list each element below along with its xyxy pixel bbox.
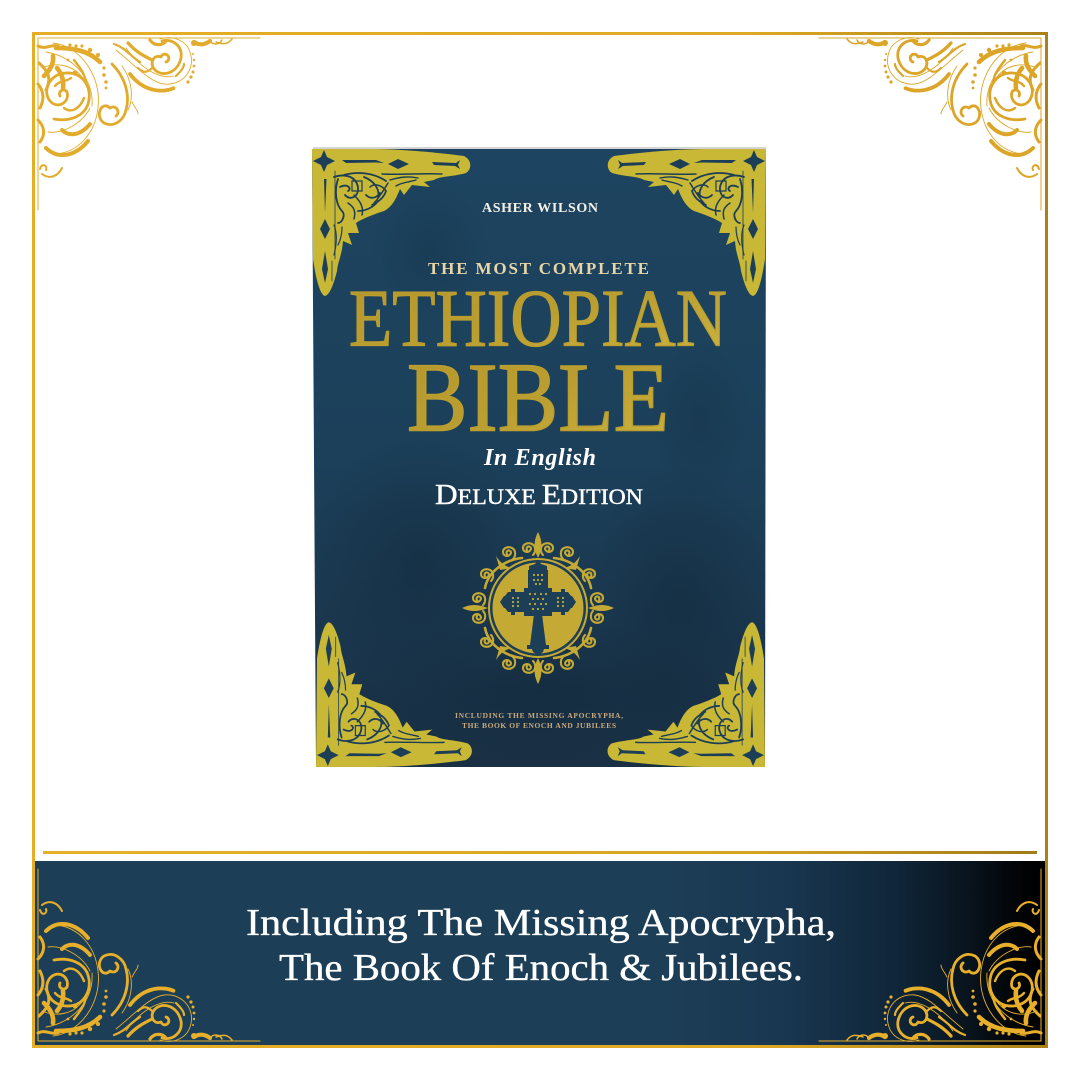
medallion disc xyxy=(492,562,584,654)
banner caption text xyxy=(246,902,836,989)
cross body xyxy=(500,560,576,616)
gold rule above banner xyxy=(43,851,1037,854)
deluxe edition: DELUXE EDITION xyxy=(435,479,643,511)
banner: bottom caption panel xyxy=(35,861,1045,1045)
cross perforations xyxy=(512,574,564,610)
flourish: top-left corner xyxy=(38,38,260,210)
banner caption text: The Book Of Enoch & Jubilees. xyxy=(279,947,803,989)
cover footnote: THE BOOK OF ENOCH AND JUBILEES xyxy=(462,721,616,730)
ornament: bottom-right xyxy=(608,622,765,767)
flourish: bottom-right corner xyxy=(819,869,1041,1041)
medallion xyxy=(462,532,614,684)
title: Bible: BIBLE xyxy=(407,344,669,452)
ornament: top-left xyxy=(312,149,470,296)
icon: ethiopian cross xyxy=(500,560,576,655)
book top shadow xyxy=(313,147,766,149)
medallion ring xyxy=(489,559,587,657)
medallion leaf tips xyxy=(462,532,614,684)
subtitle: THE MOST COMPLETE xyxy=(428,259,649,278)
flourish: top-right corner xyxy=(819,38,1041,210)
cover blotches xyxy=(310,180,770,760)
cover panel xyxy=(312,149,766,767)
ornament: top-right xyxy=(608,149,766,296)
in english: In English xyxy=(483,445,596,471)
ornament: bottom-left xyxy=(316,622,472,767)
book cover xyxy=(310,147,770,767)
banner caption text: Including The Missing Apocrypha, xyxy=(246,902,836,944)
cover footnote: INCLUDING THE MISSING APOCRYPHA, xyxy=(455,711,623,720)
banner background xyxy=(35,861,1045,1045)
title: Ethiopian: ETHIOPIAN xyxy=(349,272,727,364)
flourish: bottom-left corner xyxy=(38,869,260,1041)
author name: ASHER WILSON xyxy=(482,201,598,216)
cross stem xyxy=(527,614,549,655)
medallion scrollwork xyxy=(473,543,603,673)
cover footnote xyxy=(455,711,623,730)
